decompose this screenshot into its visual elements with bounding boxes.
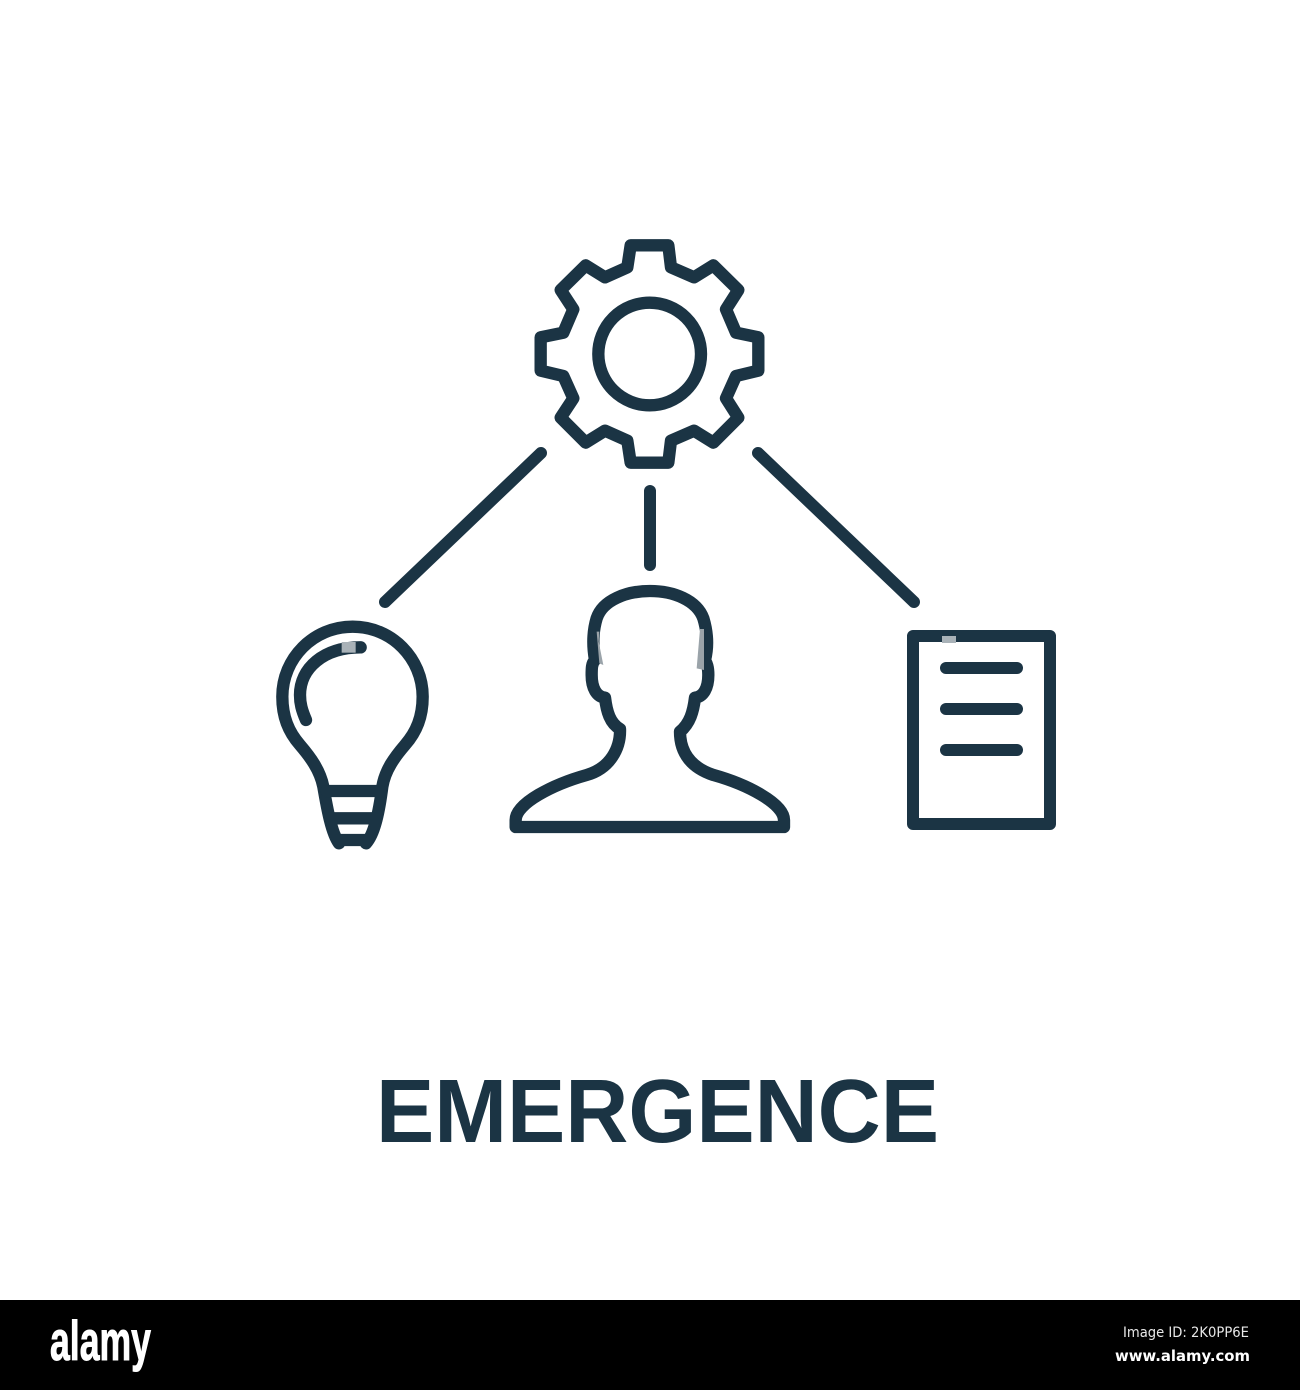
connector: gear to document: [758, 453, 914, 602]
icon: gear: [541, 245, 758, 463]
footer logo: alamy: [50, 1309, 151, 1372]
icon: person silhouette: [516, 591, 784, 827]
icon: document: [913, 636, 1050, 824]
image id: Image ID: 2K0PP6E: [1123, 1325, 1249, 1341]
connector: gear to person: [644, 491, 656, 565]
website: www.alamy.com: [1115, 1347, 1250, 1365]
footer bar: [0, 1300, 1300, 1390]
connector: gear to light bulb: [385, 453, 541, 602]
icon: light bulb: [282, 627, 423, 843]
title: EMERGENCE: [376, 1062, 939, 1162]
